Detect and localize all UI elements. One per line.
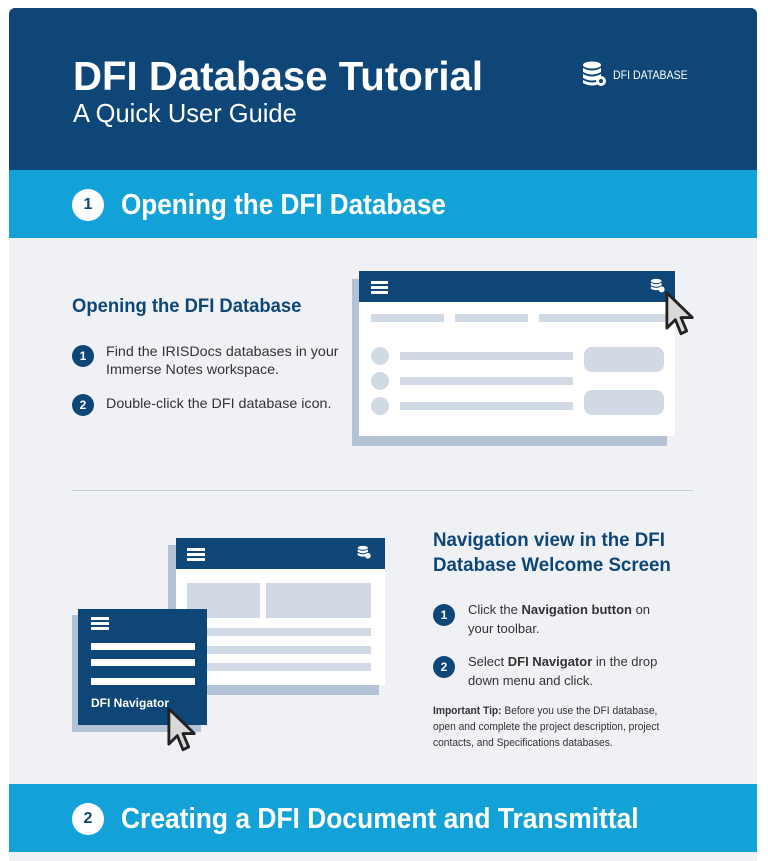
title: DFI Database Tutorial <box>73 53 483 99</box>
subheading: Database Welcome Screen <box>433 555 671 576</box>
step 2: 2 <box>80 398 86 412</box>
step 2 <box>72 394 331 416</box>
step 2: Select DFI Navigator in the drop <box>468 654 657 669</box>
nav panel <box>78 609 207 725</box>
panel: navigation instructions <box>433 530 671 749</box>
step 2: down menu and click. <box>468 673 593 688</box>
step 2: Double-click the DFI database icon. <box>106 395 331 411</box>
subheading: Navigation view in the DFI <box>433 530 665 551</box>
illustration: database window <box>352 271 694 446</box>
divider <box>72 490 693 491</box>
section heading 1: Opening the DFI Database <box>121 189 446 221</box>
tip: contacts, and Specifications databases. <box>433 737 613 749</box>
step 2: 2 <box>441 660 447 674</box>
logo: DFI database: DFI DATABASE <box>613 68 688 82</box>
step 1: 1 <box>80 349 86 363</box>
section heading 2: Creating a DFI Document and Transmittal <box>121 803 639 835</box>
panel: opening instructions <box>72 296 339 416</box>
number badge 2: 2 <box>84 810 92 827</box>
logo: DFI database <box>583 62 688 86</box>
step 2 <box>433 654 657 688</box>
header <box>9 8 757 170</box>
icon: cursor 2 <box>167 707 196 752</box>
step 1: Immerse Notes workspace. <box>106 361 279 377</box>
nav panel: DFI Navigator <box>91 696 169 710</box>
subtitle: A Quick User Guide <box>73 98 297 128</box>
section band 2 <box>9 784 757 852</box>
tip <box>433 705 660 749</box>
number badge 2 <box>72 803 104 835</box>
subheading: Opening the DFI Database <box>72 296 301 317</box>
icon: cursor <box>665 291 694 336</box>
step 1 <box>433 602 650 636</box>
step 1 <box>72 343 339 377</box>
step 1: Click the Navigation button on <box>468 602 650 617</box>
step 1: 1 <box>441 608 447 622</box>
section band 1 <box>9 170 757 238</box>
tip: Important Tip: Before you use the DFI database, <box>433 705 657 717</box>
number badge 1 <box>72 189 104 221</box>
subheading <box>433 530 671 576</box>
tip: open and complete the project description, project <box>433 721 659 733</box>
step 1: your toolbar. <box>468 621 540 636</box>
number badge 1: 1 <box>84 196 92 213</box>
illustration: navigation windows <box>72 538 385 752</box>
step 1: Find the IRISDocs databases in your <box>106 343 339 359</box>
